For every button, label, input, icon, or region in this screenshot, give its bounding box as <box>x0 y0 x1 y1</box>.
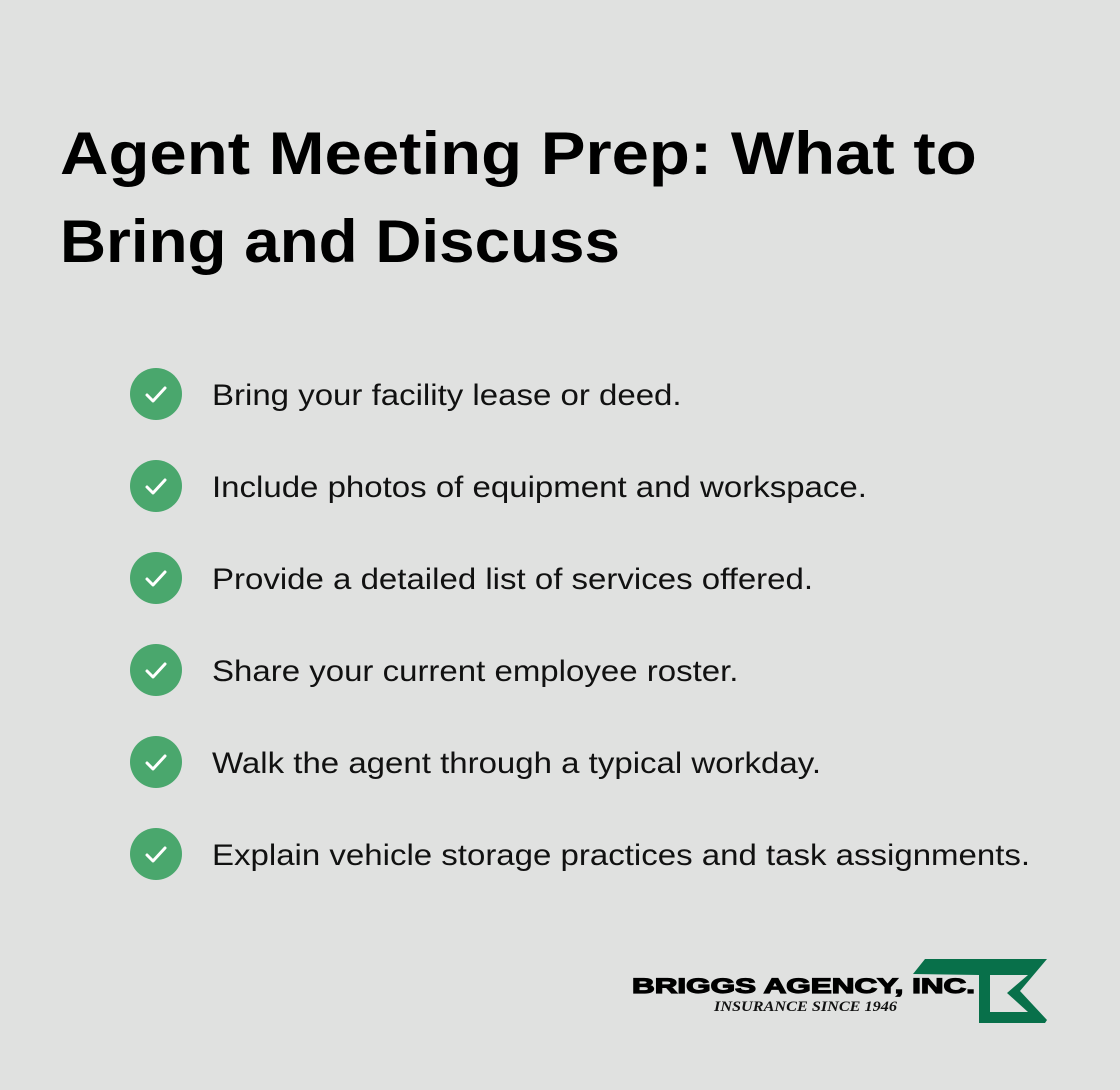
item 2 <box>130 460 867 512</box>
item 6: Explain vehicle storage practices and task assignments. <box>212 839 1030 872</box>
title: Agent Meeting Prep: What to <box>60 120 977 187</box>
logo mark <box>913 959 1047 1023</box>
item 1 <box>130 368 682 420</box>
item 6 <box>130 828 1030 880</box>
item 4 <box>130 644 738 696</box>
item 5: Walk the agent through a typical workday. <box>212 747 821 780</box>
item 2: Include photos of equipment and workspace. <box>212 471 867 504</box>
item 3 <box>130 552 813 604</box>
logo text: BRIGGS AGENCY, INC. <box>632 975 975 998</box>
item 5 <box>130 736 821 788</box>
logo tagline: INSURANCE SINCE 1946 <box>713 999 898 1015</box>
title <box>60 120 977 275</box>
title: Bring and Discuss <box>60 208 620 275</box>
item 3: Provide a detailed list of services offered. <box>212 563 813 596</box>
item 1: Bring your facility lease or deed. <box>212 379 682 412</box>
item 4: Share your current employee roster. <box>212 655 738 688</box>
